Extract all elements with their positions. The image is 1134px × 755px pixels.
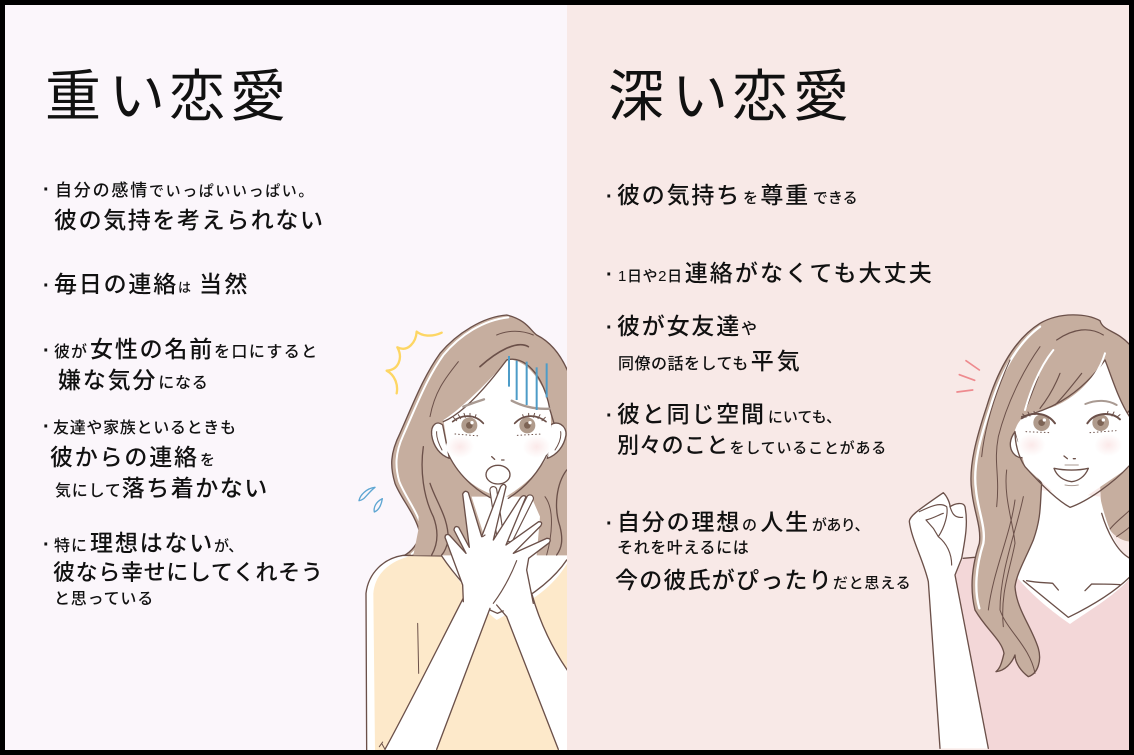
hair strands [982,347,1040,507]
text block: heavy 5 [43,530,243,556]
illustration: happy woman [909,315,1130,750]
text block: deep 4: 彼と同じ空間 [617,401,766,427]
text block: deep 3: · [606,317,613,339]
text block: heavy 2: 当然 [199,271,250,297]
emphasis marks: yellow shock lines [387,332,442,393]
text block: heavy 3 line 2: 嫌な気分 [58,367,157,393]
text block: heavy 3 [43,336,319,362]
text block: heavy 2 [43,271,250,297]
text block: heavy 1: · [43,179,50,201]
text block: heavy 3: 女性の名前 [90,336,214,362]
text block: deep 3 line 2 [618,348,803,374]
face [443,359,552,498]
nose and mouth [492,457,504,460]
text block: heavy 1: 自分の感情 [55,181,149,200]
title: heavy love: い [109,65,165,128]
text block: heavy 2: · [43,275,50,297]
shirt [955,558,1130,750]
text block: deep 5 line 3: 今の彼氏がぴったり [615,567,833,593]
text block: deep 5: 自分の理想 [617,509,741,535]
text block: deep 1: 尊重 [760,182,810,208]
eyes [453,413,546,436]
blush [446,440,468,454]
text block: deep 5: 人生 [760,509,810,535]
eyes [1022,411,1120,433]
text block: deep 4 line 2: をしていることがある [730,440,887,457]
text block: heavy 2: 毎日の連絡 [54,271,178,297]
text block: deep 4 line 2 [617,433,887,458]
title: deep love: 深 [608,65,664,128]
text block: deep 1: を [743,190,759,207]
text block: deep 4 [606,401,841,427]
text block: deep 3 line 2: 平気 [751,348,803,374]
blue sweat marks [359,487,382,512]
main hair [971,315,1130,677]
text block: heavy 3: 彼が [54,344,88,361]
text block: heavy 4 line 3 [55,475,269,501]
text block: heavy 5: · [43,534,50,556]
text block: deep 3: 彼が女友達 [617,313,741,339]
text block: deep 1 [606,182,858,208]
hands [445,484,550,603]
text block: heavy 3: を口にすると [214,344,319,361]
text block: heavy 4 line 2: 彼からの連絡 [50,444,199,470]
ears [432,423,449,458]
arm and fist [909,493,988,748]
text block: deep 2: 1日や2日 [618,268,683,285]
text block: deep 5: があり、 [812,517,869,534]
text block: deep 4: にいても、 [768,409,841,426]
text block: heavy 4 line 2: を [200,452,216,469]
text block: deep 1: 彼の気持ち [617,182,741,208]
text block: heavy 1 line 2: 彼の気持を考えられない [54,207,325,233]
bangs [443,359,554,423]
text block: deep 3 line 2: 同僚の話をしても [618,356,749,373]
panel: deep love background [567,5,1129,750]
nose and smile [1064,456,1075,459]
arms [385,597,497,751]
text block: deep 1: · [606,186,613,208]
text block: heavy 2: は [178,280,193,295]
brows [463,399,484,407]
hair back [392,315,570,556]
text block: deep 3: や [741,321,758,338]
title: heavy love: 重 [45,65,101,128]
illustration: worried woman [359,315,570,751]
text block: deep 1: できる [813,190,858,207]
ear [1010,432,1024,458]
sweater [367,555,570,750]
blue gloom lines [509,356,547,410]
title: deep love [608,65,849,128]
text block: deep 4: · [606,405,613,427]
brow [1085,401,1117,405]
title: heavy love [45,65,286,128]
text block: heavy 4: · [43,416,50,438]
text block: deep 5: · [606,513,613,535]
title: deep love: い [672,65,728,128]
title: heavy love: 愛 [230,65,286,128]
text block: deep 5 line 2: それを叶えるには [617,540,749,557]
text block: heavy 1 [43,179,315,201]
face [1015,360,1130,507]
text block: heavy 5 line 3: と思っている [54,591,154,608]
text block: heavy 5 line 2: 彼なら幸せにしてくれそう [53,560,323,585]
pink excitement lines [957,361,979,392]
text block: heavy 4 line 3: 気にして [55,483,122,500]
text block: heavy 5: 理想はない [90,530,214,556]
text block: heavy 4 line 3: 落ち着かない [122,475,269,501]
illustrations [358,314,1129,750]
text block: heavy 1: でいっぱいいっぱい。 [149,183,315,200]
blush [1018,438,1040,452]
text block: heavy 5: が、 [214,538,243,555]
panel: heavy love background [5,5,567,750]
text block: heavy 3 line 2: になる [158,375,209,392]
text block: deep 5: の [742,517,758,534]
text block: deep 5 [606,509,869,535]
text block: deep 5 line 3: だと思える [833,575,911,592]
hair front lower strands [413,496,483,556]
neck and collar [442,497,570,620]
neck and collar [1013,490,1130,624]
text block: deep 2: 連絡がなくても大丈夫 [685,260,934,286]
text block: heavy 5: 特に [54,538,88,555]
title: heavy love: 恋 [169,65,225,128]
text block: deep 2: · [606,264,613,286]
title: deep love: 恋 [732,65,788,128]
text block: heavy 4: 友達や家族といるときも [53,420,237,437]
text block: heavy 3: · [43,340,50,362]
text block: heavy 3 line 2 [58,367,209,393]
text block: deep 4 line 2: 別々のこと [617,433,729,458]
title: deep love: 愛 [793,65,849,128]
back hair [1100,468,1129,542]
